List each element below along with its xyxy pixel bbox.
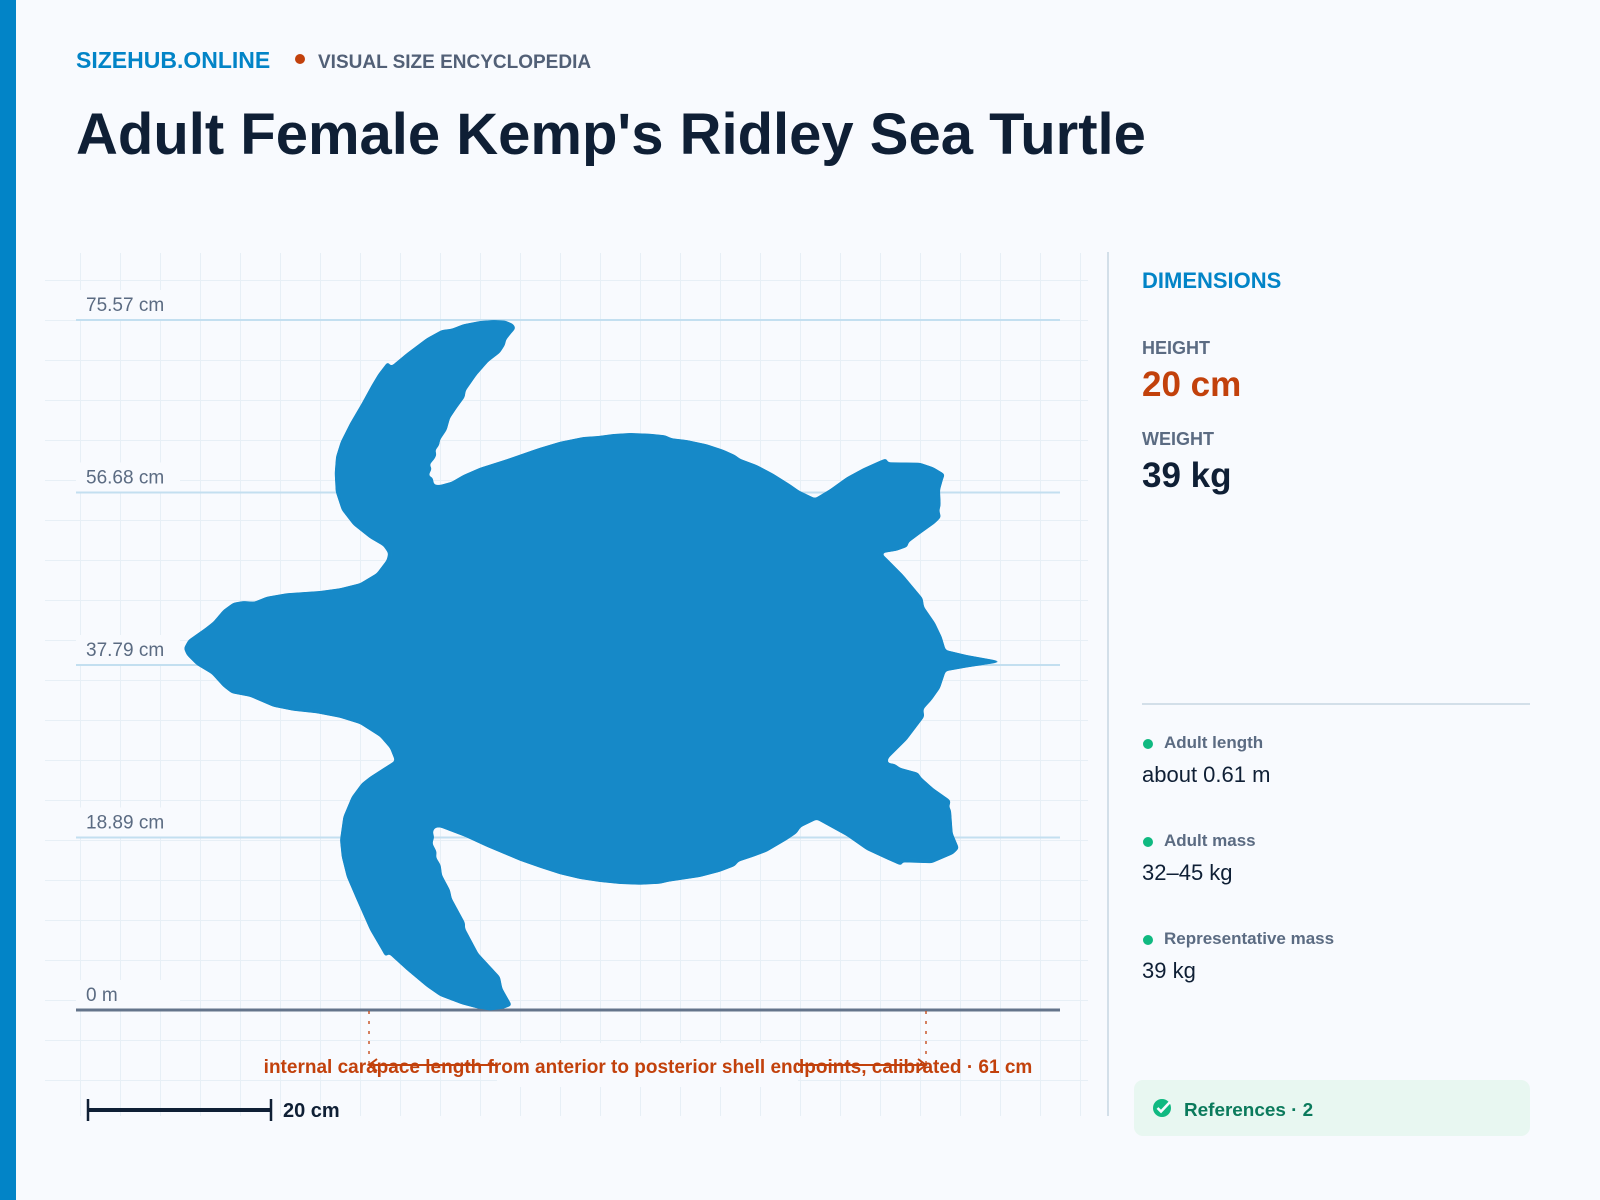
double arrow (369, 1059, 926, 1071)
turtle silhouette (184, 320, 1004, 1010)
fact: adult mass: Adult mass (1164, 831, 1256, 850)
fact: representative mass (1142, 929, 1334, 983)
label 18.89 cm: 18.89 cm (86, 812, 164, 834)
label 37.79 cm: 37.79 cm (86, 640, 164, 661)
axis labels (76, 290, 180, 1008)
height label: HEIGHT (1142, 338, 1210, 358)
weight label: WEIGHT (1142, 429, 1214, 449)
brand tagline: VISUAL SIZE ENCYCLOPEDIA (318, 52, 591, 73)
label 75.57 cm: 75.57 cm (86, 295, 164, 316)
fact: adult length: Adult length (1164, 733, 1263, 752)
dimensions heading: DIMENSIONS (1142, 268, 1281, 293)
dimension caption: internal carapace length from anterior to posterior shell endpoints, calibrated · 61 cm (264, 1057, 1032, 1078)
icon: check badge (1153, 1099, 1171, 1117)
panel: dimensions (1142, 268, 1281, 495)
length dimension annotation (264, 1011, 1032, 1087)
label 56.68 cm: 56.68 cm (86, 468, 164, 488)
references card (1134, 1080, 1530, 1136)
right dotted guide (925, 1011, 927, 1063)
height value: 20 cm (1142, 365, 1241, 404)
fact: adult length: about 0.61 m (1142, 762, 1270, 787)
sidebar divider (1107, 252, 1109, 1116)
panel: facts (1142, 733, 1334, 983)
height reference lines (76, 320, 1060, 838)
ground line (76, 1008, 1060, 1012)
brand name: SIZEHUB.ONLINE (76, 47, 270, 73)
left dotted guide (368, 1011, 370, 1063)
brand dot (295, 54, 305, 64)
left accent bar (0, 0, 16, 1200)
fact: representative mass: 39 kg (1142, 958, 1196, 983)
weight value: 39 kg (1142, 456, 1232, 495)
fact: adult mass (1142, 831, 1256, 885)
header (76, 47, 1146, 167)
fact: representative mass: Representative mass (1164, 929, 1334, 948)
scale label: 20 cm (283, 1100, 340, 1122)
label 0 m: 0 m (86, 985, 118, 1006)
fact: adult mass: 32–45 kg (1142, 860, 1233, 885)
title: Adult Female Kemp's Ridley Sea Turtle (76, 102, 1146, 167)
fact: adult length (1142, 733, 1270, 787)
scale bar (88, 1099, 340, 1122)
references label: References · 2 (1184, 1100, 1313, 1121)
